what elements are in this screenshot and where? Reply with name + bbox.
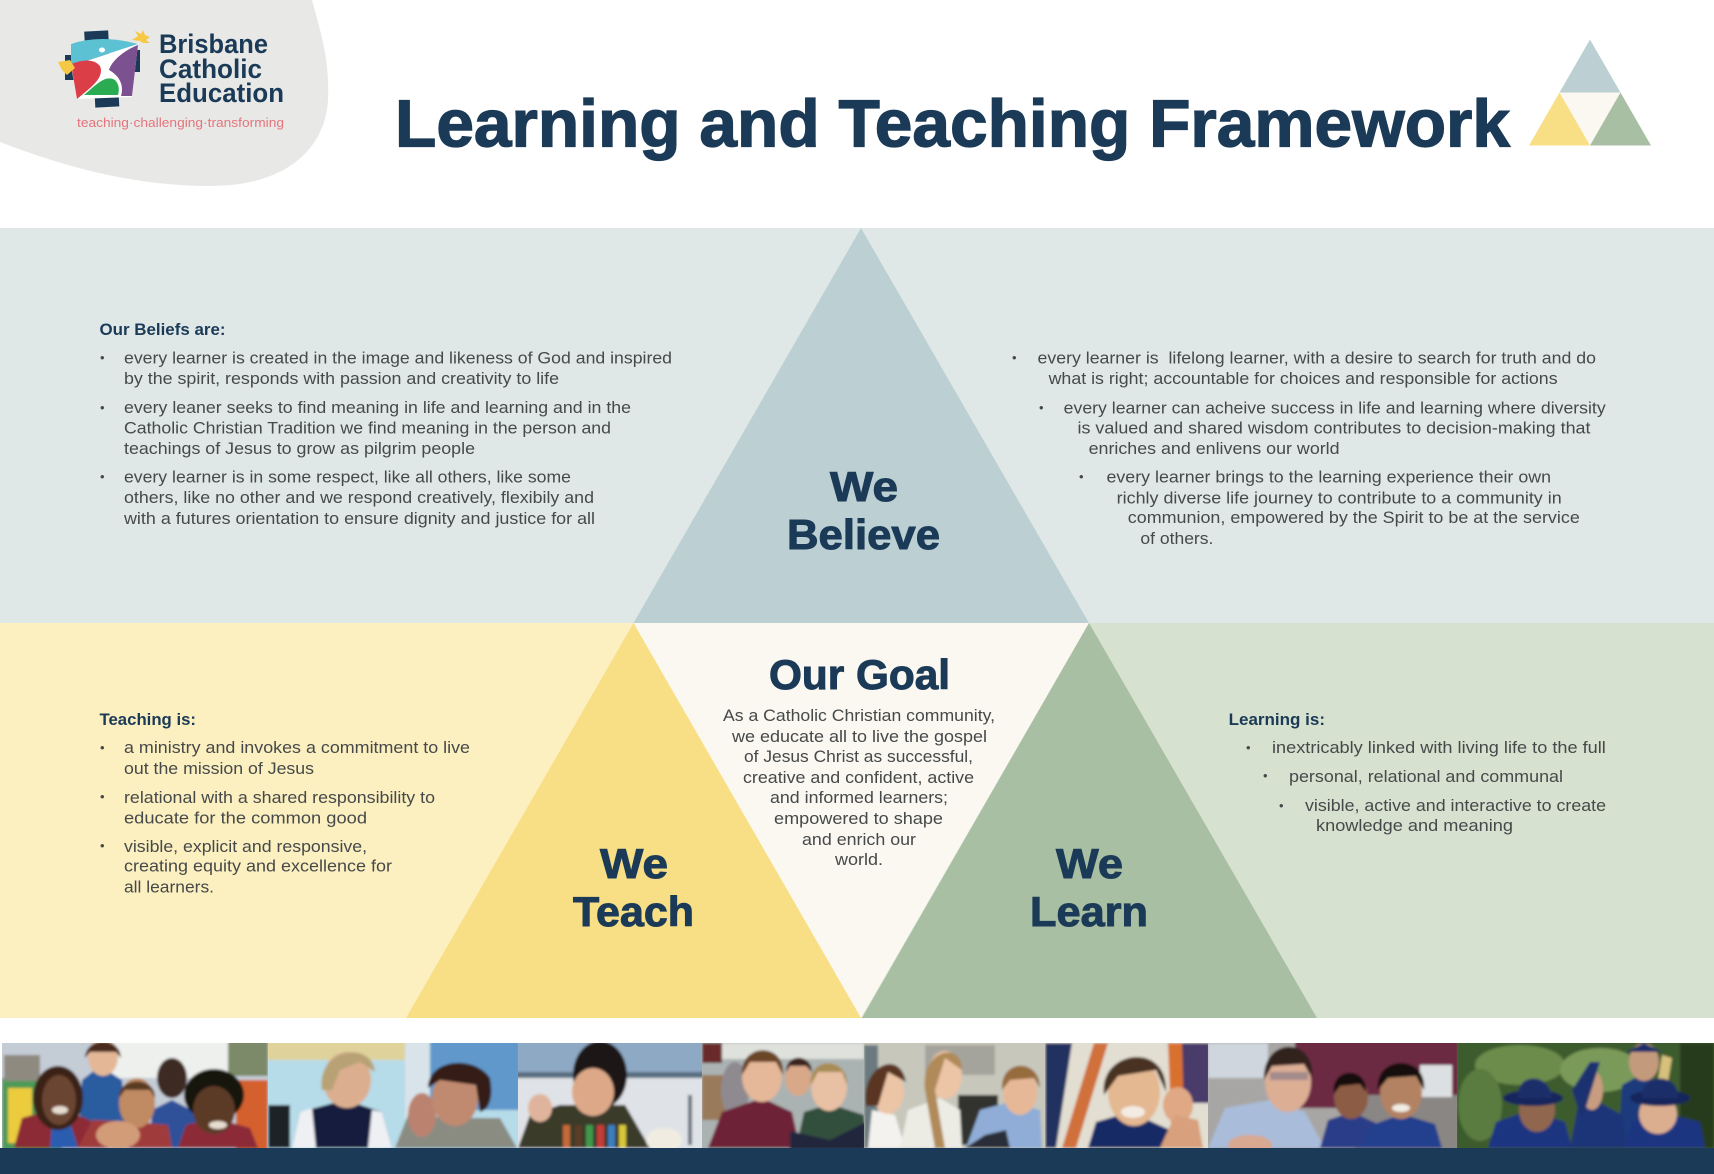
text block: beliefs continued: every learner is lifelong learner, with a desire to search for truth and do xyxy=(1038,350,1596,368)
text block: goal statement: empowered to shape xyxy=(774,810,943,828)
text block: Learning is xyxy=(1229,711,1606,835)
learning heading: Learning is: xyxy=(1229,711,1325,729)
footer bar xyxy=(0,1148,1714,1174)
photo: boy on playground xyxy=(1043,1040,1211,1152)
heading: We Teach: Teach xyxy=(573,888,694,935)
panel: teaching band xyxy=(0,623,861,1018)
learning list: • xyxy=(1246,740,1251,755)
logo wordmark: Catholic xyxy=(159,54,262,84)
text block: beliefs continued: enriches and enlivens our world xyxy=(1089,440,1340,458)
learning list: inextricably linked with living life to the full xyxy=(1272,739,1606,757)
learning list xyxy=(1246,739,1606,835)
photo: smiling children in classroom xyxy=(0,1038,270,1152)
beliefs list: • xyxy=(100,469,105,484)
panel: learning band xyxy=(861,623,1714,1018)
learning list: personal, relational and communal xyxy=(1289,768,1563,786)
text block: goal statement: and informed learners; xyxy=(770,789,948,807)
learning list: visible, active and interactive to create xyxy=(1305,797,1606,815)
text block: goal statement xyxy=(723,707,995,869)
beliefs list: others, like no other and we respond creatively, flexibily and xyxy=(124,489,594,507)
teaching list: out the mission of Jesus xyxy=(124,760,314,778)
teaching list: all learners. xyxy=(124,878,214,896)
text block: beliefs continued xyxy=(1012,350,1606,548)
title: Learning and Teaching Framework xyxy=(395,86,1511,162)
teaching heading: Teaching is: xyxy=(100,711,196,729)
heading: Our Goal: Our Goal xyxy=(769,651,950,698)
heading: We Learn: We xyxy=(1056,840,1123,887)
text block: beliefs continued: communion, empowered by the Spirit to be at the service xyxy=(1128,509,1580,527)
text block: beliefs continued: • xyxy=(1012,350,1017,365)
beliefs list xyxy=(100,350,672,528)
logo wordmark xyxy=(159,29,284,108)
beliefs list: every learner is created in the image and likeness of God and inspired xyxy=(124,350,672,368)
text block: goal statement: As a Catholic Christian community, xyxy=(723,707,995,725)
heading: We Teach xyxy=(573,840,694,935)
text block: beliefs continued: richly diverse life journey to contribute to a community in xyxy=(1117,489,1562,507)
logo wordmark: Education xyxy=(159,78,284,108)
text block: goal statement: world. xyxy=(834,851,883,869)
learning list: • xyxy=(1263,768,1268,783)
logo emblem xyxy=(58,30,150,108)
text block: goal statement: and enrich our xyxy=(802,831,917,849)
photo: teacher with students xyxy=(1208,1043,1457,1148)
teaching list: • xyxy=(100,740,105,755)
text block: Our Beliefs are xyxy=(100,321,672,528)
logo tagline: teaching·challenging·transforming xyxy=(77,116,284,130)
beliefs list: with a futures orientation to ensure dignity and justice for all xyxy=(123,510,595,528)
teaching list: • xyxy=(100,838,105,853)
photo: students in hats outdoors xyxy=(1455,1040,1714,1152)
text block: beliefs continued: • xyxy=(1039,400,1044,415)
learning list: • xyxy=(1279,798,1284,813)
logo background shape xyxy=(0,0,328,186)
photo: students talking xyxy=(862,1040,1048,1152)
triangle: Our Goal xyxy=(634,623,1089,1018)
beliefs list: • xyxy=(100,350,105,365)
text block: beliefs continued: • xyxy=(1079,469,1084,484)
teaching list: educate for the common good xyxy=(124,810,367,828)
beliefs list: every learner is in some respect, like all others, like some xyxy=(124,469,571,487)
learning list: knowledge and meaning xyxy=(1316,817,1513,835)
text block: beliefs continued: every learner brings to the learning experience their own xyxy=(1106,469,1551,487)
beliefs list: teachings of Jesus to grow as pilgrim people xyxy=(124,440,475,458)
beliefs list: every leaner seeks to find meaning in life and learning and in the xyxy=(124,399,631,417)
teaching list xyxy=(100,739,470,896)
text block: goal statement: of Jesus Christ as successful, xyxy=(744,748,973,766)
heading: We Believe: Believe xyxy=(787,511,940,558)
triangle: We Teach xyxy=(406,623,861,1018)
icon: small triangle mark xyxy=(1529,40,1651,146)
panel: beliefs band xyxy=(0,228,1714,623)
photo: boys reading a book xyxy=(700,1040,866,1152)
triangle: We Learn xyxy=(862,623,1317,1018)
text block: beliefs continued: what is right; accountable for choices and responsible for actions xyxy=(1048,370,1558,388)
beliefs list: Catholic Christian Tradition we find meaning in the person and xyxy=(124,420,611,438)
teaching list: relational with a shared responsibility to xyxy=(124,789,435,807)
text block: Teaching is xyxy=(100,711,470,896)
text block: goal statement: we educate all to live the gospel xyxy=(731,728,987,746)
text block: beliefs continued: of others. xyxy=(1140,530,1213,548)
text block: goal statement: creative and confident, active xyxy=(743,769,974,787)
photo strip xyxy=(2,1043,1714,1148)
teaching list: a ministry and invokes a commitment to live xyxy=(124,739,470,757)
beliefs heading: Our Beliefs are: xyxy=(100,321,226,339)
teaching list: creating equity and excellence for xyxy=(124,858,393,876)
heading: We Learn xyxy=(1030,840,1148,935)
text block: beliefs continued: every learner can acheive success in life and learning where diversity xyxy=(1064,400,1606,418)
heading: We Believe xyxy=(787,463,940,558)
heading: We Teach: We xyxy=(600,840,668,887)
heading: We Learn: Learn xyxy=(1030,888,1148,935)
teaching list: • xyxy=(100,789,105,804)
photo: boy and teacher talking xyxy=(266,1040,520,1152)
beliefs list: by the spirit, responds with passion and creativity to life xyxy=(124,370,559,388)
teaching list: visible, explicit and responsive, xyxy=(124,838,367,856)
logo wordmark: Brisbane xyxy=(159,29,268,59)
triangle: We Believe xyxy=(634,228,1089,623)
heading: We Believe: We xyxy=(830,463,898,510)
beliefs list: • xyxy=(100,400,105,415)
photo: girl doing science experiment xyxy=(516,1040,706,1152)
logo: Brisbane Catholic Education xyxy=(58,29,284,130)
text block: beliefs continued: is valued and shared wisdom contributes to decision-making that xyxy=(1078,420,1591,438)
